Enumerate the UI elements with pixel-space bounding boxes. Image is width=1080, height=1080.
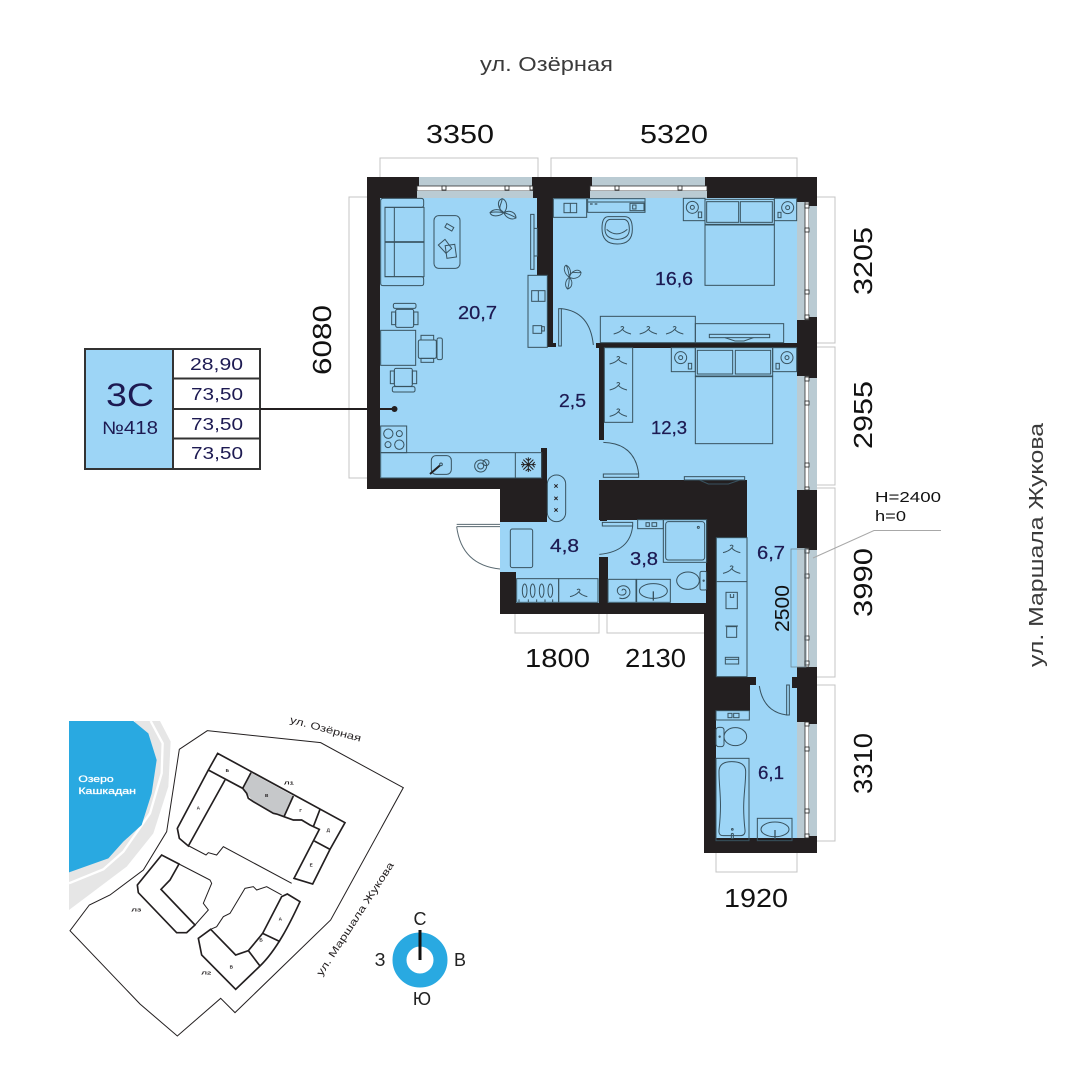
building L2	[198, 887, 300, 989]
site labels: Е	[310, 862, 313, 867]
dimension labels: 3310	[848, 733, 878, 794]
lake: Озеро	[78, 774, 114, 784]
building L3	[137, 855, 212, 933]
apartment type table	[85, 349, 260, 469]
furniture: hallway, bathroom, closet	[457, 475, 747, 677]
compass	[375, 909, 466, 1009]
selected section	[243, 773, 293, 817]
room areas: 4,8	[550, 536, 579, 556]
site labels: Г	[299, 808, 302, 813]
furniture: living room and kitchen	[381, 198, 593, 478]
site labels	[131, 768, 331, 976]
site street Zhukova: ул. Маршала Жукова	[315, 860, 397, 978]
site boundary	[70, 731, 403, 1036]
site street Ozernaya: ул. Озёрная	[289, 715, 362, 745]
lake: Кашкадан	[78, 786, 136, 796]
window height callout: h=0	[875, 509, 906, 525]
dimension labels: 1800	[525, 643, 590, 673]
dimension guide lines	[349, 158, 835, 872]
site labels: Л1	[284, 781, 295, 786]
room areas: 16,6	[655, 269, 693, 289]
interior walls	[380, 177, 797, 711]
room areas: 3,8	[630, 549, 658, 569]
floor plan rooms	[380, 198, 797, 838]
apartment type table: 73,50	[191, 443, 243, 463]
compass: С	[414, 909, 426, 929]
compass: В	[454, 950, 466, 970]
site labels: Д	[327, 828, 331, 833]
compass: З	[375, 950, 385, 970]
lake	[69, 721, 171, 910]
room areas: 12,3	[651, 418, 687, 438]
site labels: Б	[226, 768, 230, 773]
site labels: Л3	[131, 908, 142, 913]
site labels: А	[279, 917, 283, 922]
dimension labels: 2130	[625, 643, 686, 673]
site plan	[69, 715, 403, 1036]
dimension labels: 5320	[640, 119, 708, 149]
window height callout: H=2400	[875, 490, 941, 506]
dimension labels: 6080	[307, 305, 337, 375]
street label: Ozernaya: ул. Озёрная	[480, 54, 613, 76]
dimension labels: 3350	[426, 119, 494, 149]
dimension labels: 1920	[724, 883, 788, 913]
floor plan walls	[367, 177, 817, 853]
compass: Ю	[413, 989, 431, 1009]
furniture: bedrooms	[553, 198, 797, 484]
apartment type table: 28,90	[190, 354, 243, 374]
dimension labels: 3205	[848, 227, 878, 295]
dimension labels: 2955	[848, 381, 878, 449]
dimension labels: 3990	[848, 548, 878, 617]
apartment type table: 73,50	[191, 414, 243, 434]
apartment type table: №418	[102, 418, 158, 438]
apartment type table: 73,50	[191, 384, 243, 404]
dimension labels	[307, 119, 878, 913]
room areas: 6,1	[758, 763, 784, 783]
room areas	[458, 269, 785, 783]
site labels: В	[265, 793, 269, 798]
window height callout	[813, 490, 941, 558]
site labels: Л2	[201, 971, 212, 976]
site labels: Б	[259, 938, 263, 943]
street label: Zhukova: ул. Маршала Жукова	[1026, 422, 1048, 667]
room areas: 2,5	[559, 391, 586, 411]
room areas: 20,7	[458, 303, 497, 323]
leader line to apartment	[260, 406, 398, 412]
windows	[417, 177, 817, 838]
building L1	[177, 753, 345, 884]
site labels: В	[230, 964, 234, 969]
room areas: 6,7	[757, 543, 785, 563]
site labels: А	[197, 806, 201, 811]
furniture: main bathroom	[716, 685, 792, 841]
window width label: 2500	[772, 585, 794, 632]
apartment type table: 3С	[106, 377, 154, 413]
